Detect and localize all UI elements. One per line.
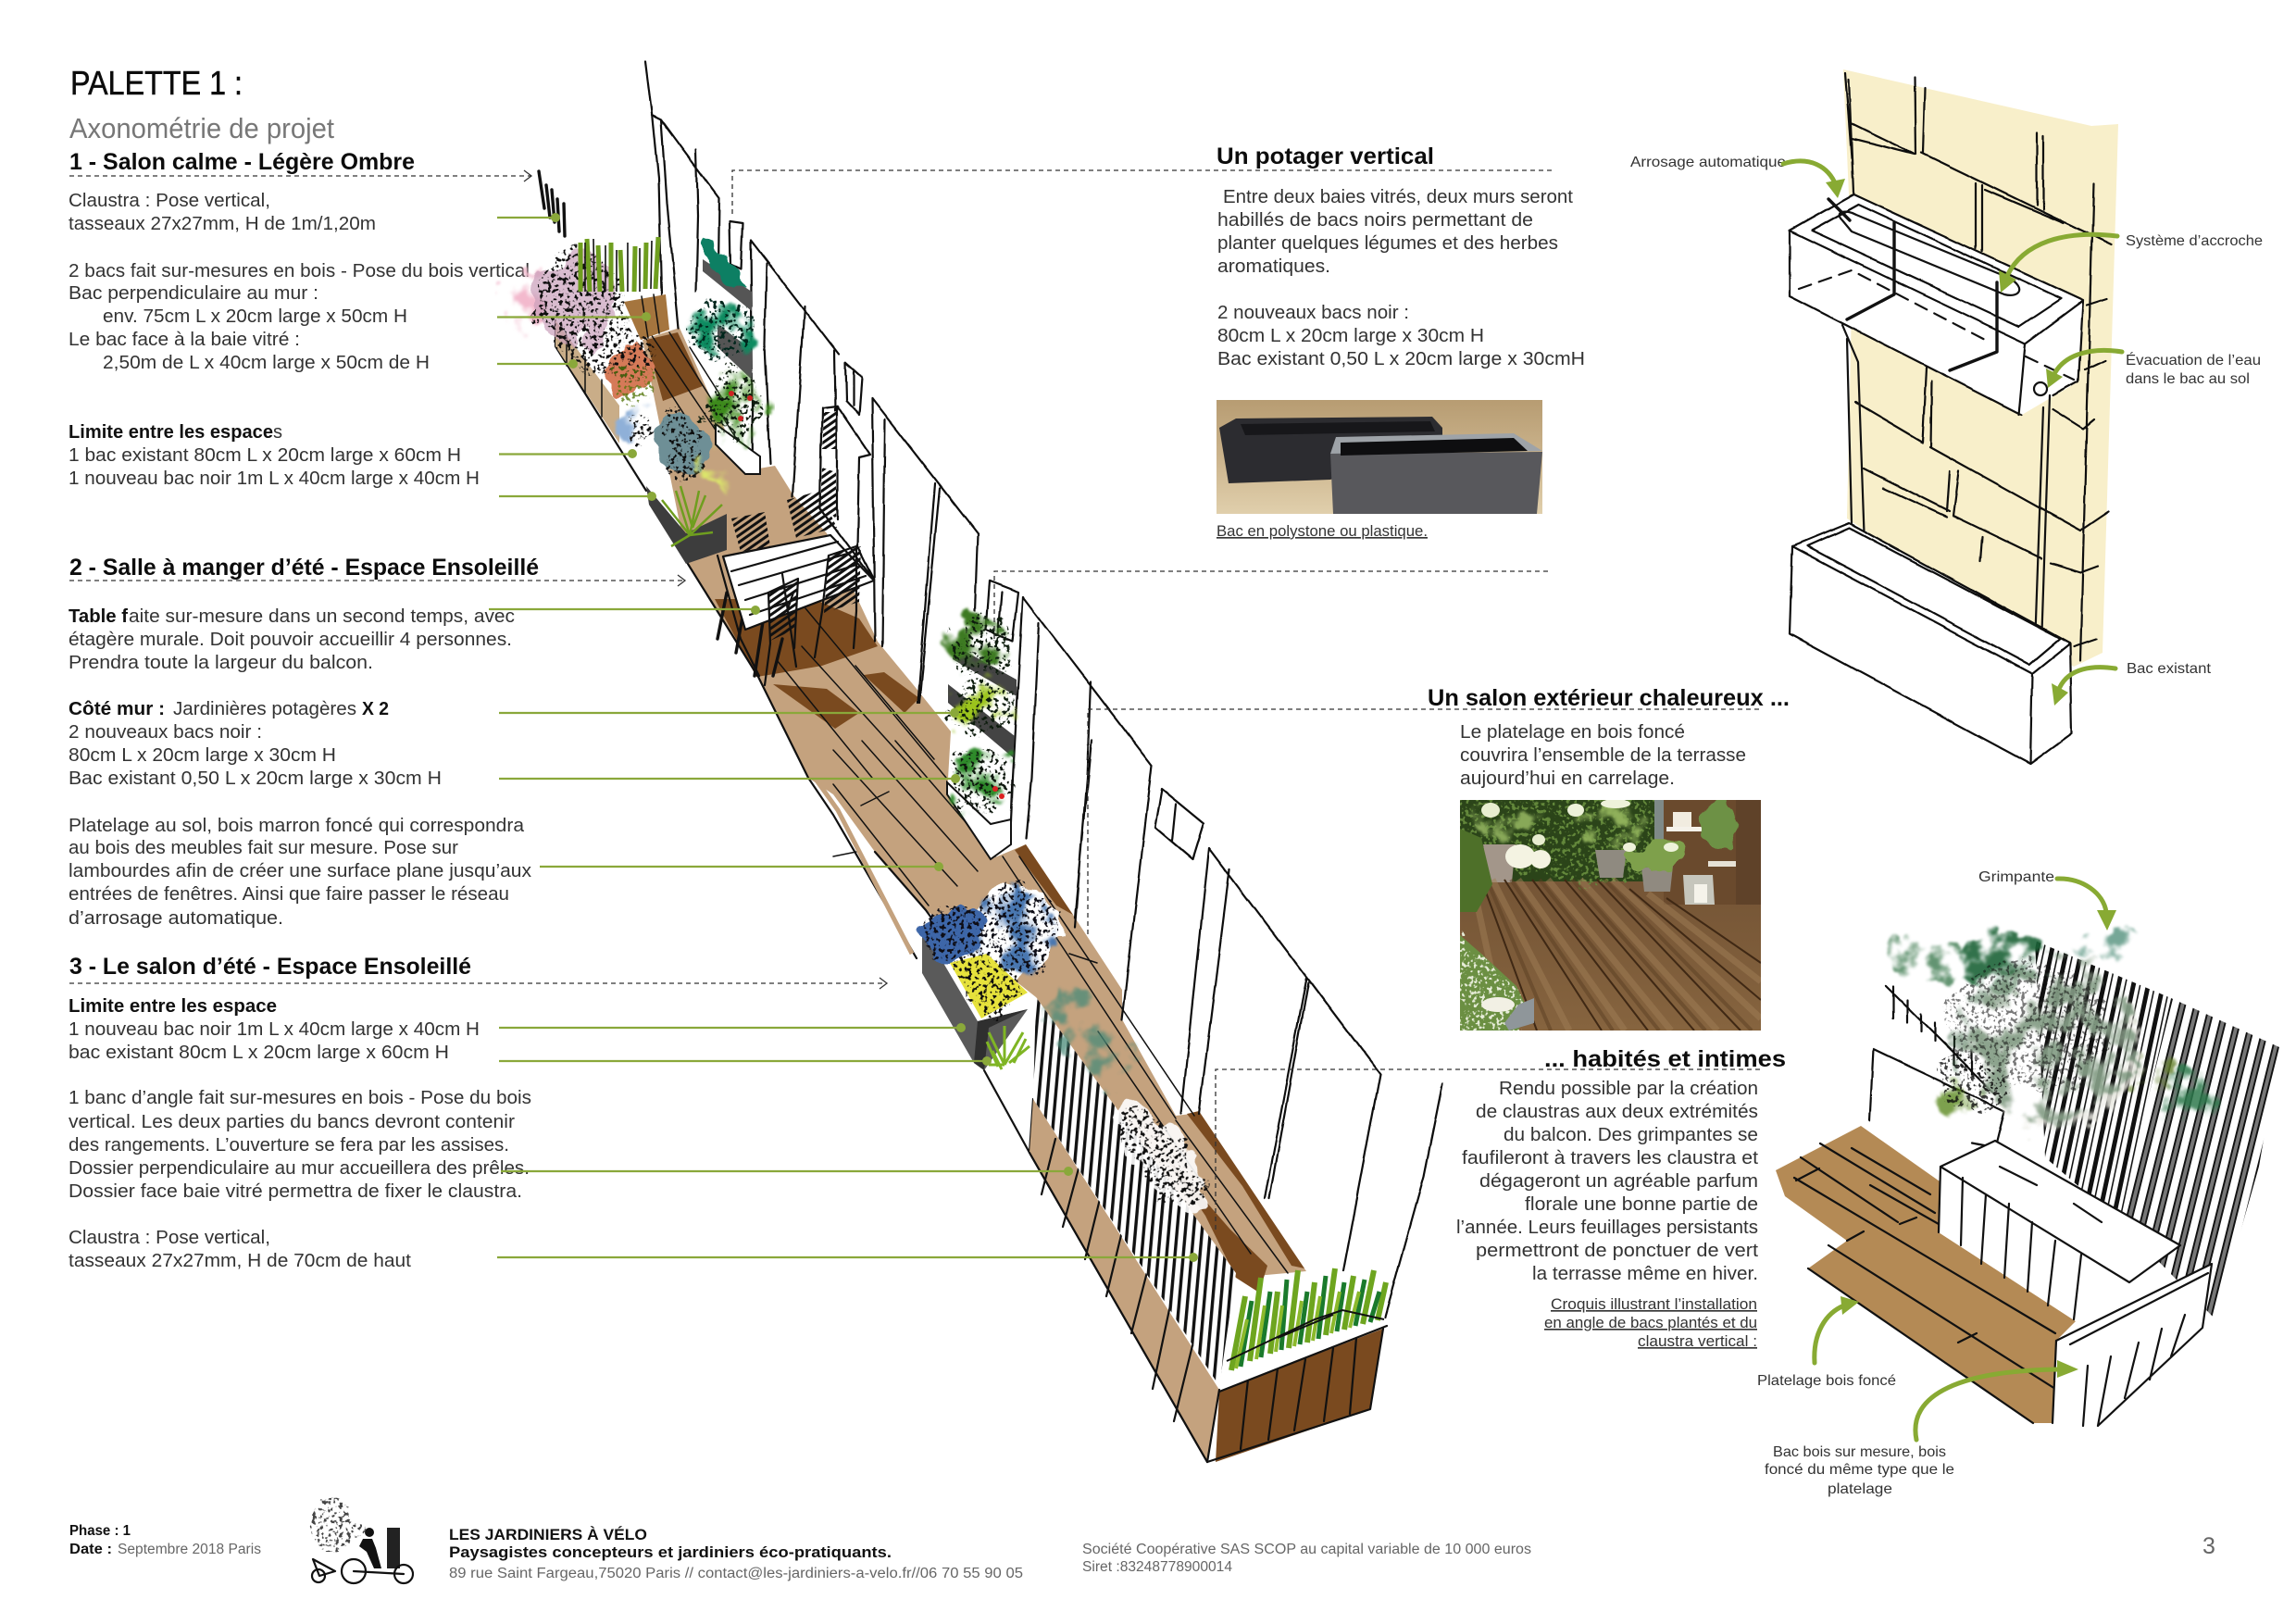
footer: phase and date: Phase : 1 — [69, 1523, 131, 1539]
section 2 text: Salle à manger: Jardinières potagères — [173, 699, 356, 719]
wall: brick lines — [1845, 72, 2111, 660]
label: bac bois sur mesure — [1765, 1360, 2078, 1497]
section 3 text: Le salon d'été: Dossier face baie vitré permettra de fixer le claustra. — [69, 1181, 522, 1202]
section 2 text: Salle à manger: Bac existant 0,50 L x 20cm large x 30cm H — [69, 768, 442, 789]
dashed connector: salon extérieur — [1088, 709, 1763, 934]
photo: black and grey planters — [1217, 400, 1542, 514]
panel: un potager vertical: planter quelques légumes et des herbes — [1217, 233, 1558, 254]
panel: un potager vertical: Entre deux baies vitrés, deux murs seront — [1223, 187, 1573, 207]
bench: dark front face — [1216, 1329, 1383, 1462]
plants: prêles grass on bench — [1227, 1268, 1386, 1370]
upper planter — [1790, 194, 2083, 415]
lower existing planter — [1790, 523, 2072, 764]
heading: section 1: 1 - Salon calme - Légère Ombre — [69, 149, 415, 175]
heading: section 3: 3 - Le salon d’été - Espace Ensoleillé — [69, 954, 471, 980]
dashed arrow: section 2 — [69, 580, 684, 581]
section 1 text: Salon calme: Limite entre les espace — [69, 422, 273, 443]
section 1 text: Salon calme: 1 bac existant 80cm L x 20cm large x 60cm H — [69, 445, 461, 466]
section 3 text: Le salon d'été: Claustra : Pose vertical, — [69, 1228, 270, 1248]
footer: phase and date: Septembre 2018 Paris — [118, 1542, 261, 1557]
label: bac existant: Bac existant — [2127, 661, 2212, 677]
label: platelage bois foncé: Platelage bois foncé — [1757, 1373, 1896, 1389]
lower planter: grey bac — [922, 927, 1028, 1070]
plants: first claustra — [539, 171, 565, 236]
wall: cream background — [1843, 69, 2118, 667]
section 1 text: Salon calme — [69, 149, 531, 489]
section 2 text: Salle à manger: entrées de fenêtres. Ainsi que faire passer le réseau — [69, 884, 509, 905]
section 1 text: Salon calme: 1 nouveau bac noir 1m L x 40cm large x 40cm H — [69, 468, 480, 489]
label: évacuation de l'eau: dans le bac au sol — [2126, 371, 2250, 387]
section 2 text: Salle à manger: Prendra toute la largeur du balcon. — [69, 653, 373, 673]
caption: croquis — [1544, 1296, 1757, 1350]
vertical garden 1 — [687, 236, 762, 474]
section 2 text: Salle à manger: Table f — [69, 606, 128, 627]
bench: white cushion strip — [1219, 1315, 1387, 1392]
section 3 text: Le salon d'été: 1 nouveau bac noir 1m L x 40cm large x 40cm H — [69, 1019, 480, 1040]
label: évacuation de l'eau — [2046, 350, 2261, 388]
section 1 text: Salon calme: 2 bacs fait sur-mesures en bois - Pose du bois vertical — [69, 261, 530, 281]
panel: habités et intimes: du balcon. Des grimpantes se — [1504, 1125, 1758, 1145]
caption: croquis: Croquis illustrant l’installation — [1551, 1296, 1757, 1313]
section 3 text: Le salon d'été: tasseaux 27x27mm, H de 70cm de haut — [69, 1251, 411, 1271]
label: arrosage automatique: Arrosage automatique — [1630, 155, 1786, 170]
section 2 text: Salle à manger: 2 nouveaux bacs noir : — [69, 722, 262, 743]
label: système d'accroche — [1999, 233, 2263, 293]
dashed connector: jardinières — [994, 571, 1548, 639]
panel: habités et intimes: de claustras aux deux extrémités — [1476, 1102, 1758, 1122]
label: bac bois sur mesure: platelage — [1828, 1481, 1892, 1497]
dashed connector: habités et intimes — [1216, 1069, 1762, 1230]
panel: un salon extérieur chaleureux: Le platelage en bois foncé — [1460, 722, 1685, 743]
page number: 3 — [2202, 1533, 2215, 1559]
section 2 text: Salle à manger — [69, 555, 685, 929]
section 2 text: Salle à manger: aite sur-mesure dans un second temps, avec — [129, 606, 515, 627]
dashed arrow: section 1 — [69, 175, 530, 177]
footer: company name and contact: 89 rue Saint Fargeau,75020 Paris // contact@les-jardiniers-a-velo.fr//06 70 55 90 05 — [449, 1566, 1023, 1581]
footer: legal info: Société Coopérative SAS SCOP au capital variable de 10 000 euros — [1082, 1542, 1531, 1557]
table and chairs — [718, 491, 874, 685]
footer: logo bicycle gardener — [312, 1506, 413, 1583]
panel: habités et intimes: faufileront à travers les claustra et — [1462, 1148, 1758, 1168]
section 1 text: Salon calme: 2,50m de L x 40cm large x 50cm de H — [103, 353, 430, 373]
floor: light wood decking — [643, 328, 1306, 1278]
footer: legal info: Siret :83248778900014 — [1082, 1559, 1232, 1575]
shelving unit with hatching — [820, 406, 874, 581]
low wall and railing — [1870, 986, 2004, 1148]
footer: company name and contact: Paysagistes concepteurs et jardiniers éco-pratiquants. — [449, 1543, 892, 1561]
section 2 text: Salle à manger: Platelage au sol, bois marron foncé qui correspondra — [69, 816, 525, 836]
section 3 text: Le salon d'été: Dossier perpendiculaire au mur accueillera des prêles. — [69, 1158, 530, 1179]
subtitle: Axonométrie de projet — [69, 112, 334, 144]
plants: green grasses — [580, 237, 658, 292]
panel: un potager vertical: aromatiques. — [1217, 256, 1330, 277]
panel: habités et intimes: Rendu possible par la création — [1499, 1079, 1758, 1099]
sketch: vertical planter on wall — [1630, 69, 2263, 764]
title: PALETTE 1 : — [70, 64, 243, 102]
section 2 text: Salle à manger: au bois des meubles fait sur mesure. Pose sur — [69, 838, 458, 858]
footer: legal info — [1082, 1542, 1531, 1575]
floor: thick strokes under the table — [718, 593, 782, 676]
panel: un potager vertical: 2 nouveaux bacs noir : — [1217, 303, 1409, 323]
floor: plank lines — [639, 332, 1288, 1273]
plants: green spiky grass — [987, 1026, 1029, 1069]
section 1 text: Salon calme: tasseaux 27x27mm, H de 1m/1,20m — [69, 214, 376, 234]
section 3 text: Le salon d'été: 1 banc d’angle fait sur-mesures en bois - Pose du bois — [69, 1088, 531, 1108]
dashed connector: potager vertical — [732, 170, 1554, 214]
section 2 text: Salle à manger: 80cm L x 20cm large x 30cm H — [69, 745, 336, 766]
footer: company name and contact: LES JARDINIERS À VÉLO — [449, 1526, 647, 1543]
pipes — [1842, 325, 2050, 646]
plants: orange foliage — [577, 327, 658, 402]
label: système d'accroche: Système d’accroche — [2126, 233, 2263, 249]
wall lamps — [845, 363, 1204, 859]
planter box — [1939, 1141, 2180, 1321]
heading: salon: Un salon extérieur chaleureux ... — [1428, 685, 1790, 711]
caption: croquis: en angle de bacs plantés et du — [1544, 1315, 1757, 1331]
panel: habités et intimes: permettront de ponctuer de vert — [1476, 1241, 1758, 1261]
panel: habités et intimes: la terrasse même en hiver. — [1532, 1264, 1758, 1284]
plants: spiky green — [662, 486, 722, 546]
label: grimpante: Grimpante — [1978, 869, 2054, 885]
section 1 text: Salon calme: Bac perpendiculaire au mur : — [69, 283, 318, 304]
section 2 text: Salle à manger: lambourdes afin de créer une surface plane jusqu’aux — [69, 861, 531, 881]
footer: phase and date: Date : — [69, 1542, 112, 1557]
section 2 text: Salle à manger: d’arrosage automatique. — [69, 908, 283, 929]
plants: yellow ground cover — [950, 954, 1028, 1018]
panel: un salon extérieur chaleureux: aujourd’hui en carrelage. — [1460, 768, 1675, 789]
floor: dark wood shadows — [646, 332, 1304, 1293]
label: bac bois sur mesure: foncé du même type que le — [1765, 1462, 1954, 1478]
section 2 text: Salle à manger: X 2 — [362, 699, 389, 719]
sketch: corner planter with claustra — [1757, 869, 2279, 1497]
label: évacuation de l'eau: Évacuation de l’eau — [2126, 351, 2261, 369]
panel: habités et intimes: florale une bonne partie de — [1525, 1194, 1758, 1215]
walls and windows sketch lines — [645, 61, 1442, 1317]
photo caption: Bac en polystone ou plastique. — [1217, 523, 1428, 540]
section 3 text: Le salon d'été: bac existant 80cm L x 20cm large x 60cm H — [69, 1043, 449, 1063]
planter: wooden bac top — [624, 294, 669, 340]
plants: blue flowers — [920, 886, 1056, 975]
edge: outer balcony line — [555, 320, 1207, 1462]
plants: blue and teal — [620, 411, 732, 496]
section 1 text: Salon calme: s — [273, 422, 282, 443]
panel: un potager vertical: Bac existant 0,50 L x 20cm large x 30cmH — [1217, 349, 1585, 369]
section 3 text: Le salon d'été — [69, 954, 887, 1271]
heading: habités: ... habités et intimes — [1544, 1046, 1786, 1072]
deck: dark wood platform — [1776, 1126, 2076, 1423]
dashed arrow: section 3 — [69, 982, 886, 984]
heading: potager: Un potager vertical — [1217, 144, 1434, 169]
bench claustra — [1033, 975, 1236, 1386]
label: platelage bois foncé — [1757, 1296, 1896, 1389]
footer: phase and date — [69, 1523, 261, 1557]
panel: un potager vertical: habillés de bacs noirs permettant de — [1217, 210, 1533, 231]
footer: company name and contact — [449, 1526, 1023, 1581]
bench: side face — [1029, 1099, 1219, 1462]
section 1 text: Salon calme: Claustra : Pose vertical, — [69, 191, 270, 211]
label: bac existant — [2052, 661, 2212, 706]
grimpante foliage — [1891, 928, 2216, 1136]
caption: croquis: claustra vertical : — [1638, 1333, 1757, 1350]
panel: habités et intimes: l’année. Leurs feuillages persistants — [1456, 1218, 1758, 1238]
panel: un potager vertical — [1217, 144, 1585, 540]
section 3 text: Le salon d'été: Limite entre les espace — [69, 996, 277, 1017]
wooden bench box — [2053, 1264, 2212, 1426]
photo: wooden deck with flowers — [1460, 800, 1761, 1031]
heading: section 2: 2 - Salle à manger d’été - Espace Ensoleillé — [69, 555, 539, 581]
section 1 text: Salon calme: env. 75cm L x 20cm large x 50cm H — [103, 306, 407, 327]
section 3 text: Le salon d'été: vertical. Les deux parties du bancs devront contenir — [69, 1112, 515, 1132]
label: arrosage automatique — [1630, 155, 1845, 198]
claustra slats — [2035, 941, 2279, 1319]
panel: un potager vertical: 80cm L x 20cm large x 30cm H — [1217, 326, 1484, 346]
section 2 text: Salle à manger: Côté mur : — [69, 699, 165, 719]
section 3 text: Le salon d'été: des rangements. L’ouverture se fera par les assises. — [69, 1135, 509, 1156]
section 1 text: Salon calme: Le bac face à la baie vitré : — [69, 330, 300, 350]
panel: habités et intimes — [1456, 1046, 1786, 1350]
section 2 text: Salle à manger: étagère murale. Doit pouvoir accueillir 4 personnes. — [69, 630, 512, 650]
planter: black bac — [646, 486, 727, 564]
label: bac bois sur mesure: Bac bois sur mesure, bois — [1773, 1444, 1946, 1460]
green leader lines — [489, 213, 1198, 1262]
panel: habités et intimes: dégageront un agréable parfum — [1479, 1171, 1758, 1192]
vertical garden 2 — [947, 616, 1017, 859]
panel: un salon extérieur chaleureux: couvrira l’ensemble de la terrasse — [1460, 745, 1746, 766]
axonometric drawing of the balcony — [507, 61, 1442, 1462]
plants: pink foliage — [507, 250, 628, 352]
panel: un salon extérieur chaleureux — [1428, 685, 1790, 1031]
label: grimpante — [1978, 869, 2116, 931]
